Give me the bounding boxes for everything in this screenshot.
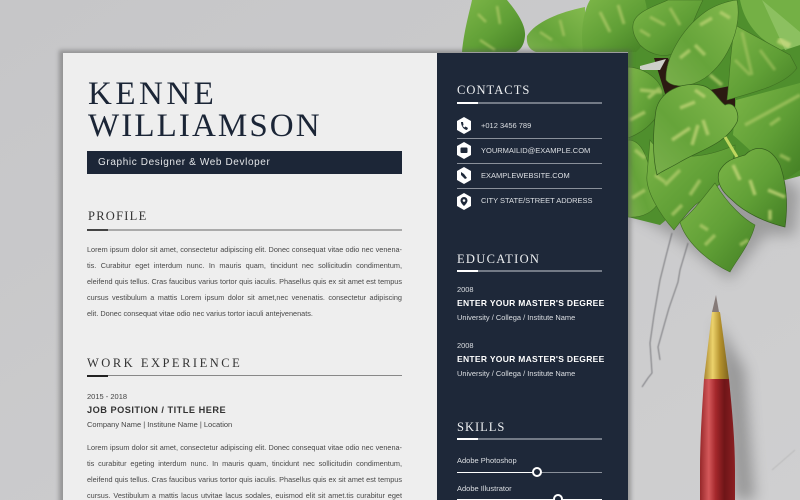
contact icons bbox=[457, 117, 471, 210]
profile text bbox=[87, 245, 402, 318]
pen shadow bbox=[716, 320, 755, 500]
leaf: far top right bbox=[740, 0, 800, 50]
education entry 2 bbox=[457, 341, 605, 378]
leaf: stem bbox=[725, 137, 737, 157]
name bbox=[88, 76, 322, 144]
leaf: centre big bbox=[654, 84, 738, 175]
skills heading: SKILLS bbox=[457, 420, 505, 434]
work text bbox=[87, 443, 402, 500]
skill: photoshop bbox=[457, 456, 602, 477]
education entry 1: ENTER YOUR MASTER'S DEGREE bbox=[457, 298, 605, 308]
education entry 1: University / Collega / Institute Name bbox=[457, 313, 575, 322]
plant underlay bbox=[628, 0, 800, 225]
work experience heading: WORK EXPERIENCE bbox=[87, 356, 242, 370]
paper shadow bbox=[59, 50, 631, 500]
work rule bbox=[87, 375, 402, 376]
resume right panel bbox=[437, 53, 628, 500]
pen bbox=[700, 295, 735, 500]
skill: illustrator: Adobe Illustrator bbox=[457, 484, 512, 493]
plant pot soil bbox=[654, 58, 735, 110]
contact email: YOURMAILID@EXAMPLE.COM bbox=[481, 146, 590, 155]
skills rule bbox=[457, 438, 602, 440]
contacts rule bbox=[457, 102, 602, 104]
skill: photoshop: Adobe Photoshop bbox=[457, 456, 517, 465]
profile text: cursus vestibulum a mattis Lorem ipsum dolor sit amet,nec venenatis. consectetur adipiscing bbox=[87, 293, 402, 302]
job title bar: Graphic Designer & Web Devloper bbox=[98, 157, 270, 168]
job title bar bbox=[87, 151, 402, 174]
profile text: tis. Curabitur eget interdum nunc. In mauris quam, tincidunt nec sollicitudin condimentum, bbox=[87, 261, 402, 270]
leaf: top right of the page bbox=[582, 0, 648, 52]
work dates: 2015 - 2018 bbox=[87, 392, 127, 401]
contact separators bbox=[457, 138, 602, 189]
profile text: eleifend quis tellus. Cras faucibus varius tortor quis iaculis. Phasellus quis ex sit amet est tempus bbox=[87, 277, 402, 286]
profile heading: PROFILE bbox=[88, 209, 147, 223]
profile text: elit. Donec consequat vitae odio nec varius tortor iaculi antejvenenats. bbox=[87, 309, 313, 318]
contact phone: +012 3456 789 bbox=[481, 121, 531, 130]
leaf: top left small bbox=[462, 0, 525, 52]
contacts heading: CONTACTS bbox=[457, 83, 530, 97]
work text: Lorem ipsum dolor sit amet, consectetur adipiscing elit. Donec consequat vitae odio nec venena- bbox=[87, 443, 402, 452]
leaf: far left lower bbox=[628, 140, 657, 217]
education entry 2: 2008 bbox=[457, 341, 474, 350]
education entry 2: University / Collega / Institute Name bbox=[457, 369, 575, 378]
leaf: tall centre top bbox=[666, 0, 738, 86]
leaf: top middle bbox=[527, 7, 585, 52]
skill: illustrator bbox=[457, 484, 602, 500]
work text: tis curabitur egeting interdum nunc. In mauris quam, tincidunt nec sollicitudin condimentum, bbox=[87, 459, 402, 468]
work text: eleifend quis tellus. Cras faucibus varius tortor quis iaculis. Phasellus quis ex sit amet est tempus bbox=[87, 475, 402, 484]
contact address: CITY STATE/STREET ADDRESS bbox=[481, 196, 593, 205]
company: Company Name | Institune Name | Location bbox=[87, 420, 232, 429]
job title: JOB POSITION / TITLE HERE bbox=[87, 405, 226, 415]
leaf: lower right bbox=[733, 83, 800, 180]
name: WILLIAMSON bbox=[88, 108, 322, 144]
leaf: lower spreading bbox=[647, 140, 735, 230]
leaf: left round bbox=[628, 67, 663, 138]
education rule bbox=[457, 270, 602, 272]
education heading: EDUCATION bbox=[457, 252, 540, 266]
profile text: Lorem ipsum dolor sit amet, consectetur adipiscing elit. Donec consequat vitae odio nec venena- bbox=[87, 245, 402, 254]
education entry 1 bbox=[457, 285, 605, 322]
work text: cursus. Vestibulum a mattis lacus utvitae lacus sodales, euismod elit sit amet.tis curabitur eget bbox=[87, 491, 402, 500]
education entry 1: 2008 bbox=[457, 285, 474, 294]
profile rule bbox=[87, 229, 402, 231]
contact website: EXAMPLEWEBSITE.COM bbox=[481, 171, 570, 180]
leaf: lower right heart bbox=[718, 148, 787, 227]
marble veins bbox=[642, 233, 795, 470]
resume left panel bbox=[63, 53, 437, 500]
plant shadow bbox=[628, 150, 800, 280]
leaf: bottom bbox=[680, 183, 755, 272]
name: KENNE bbox=[88, 76, 217, 112]
leaf: right upper bbox=[727, 25, 797, 100]
leaf: upper left round bbox=[633, 0, 703, 55]
education entry 2: ENTER YOUR MASTER'S DEGREE bbox=[457, 354, 605, 364]
